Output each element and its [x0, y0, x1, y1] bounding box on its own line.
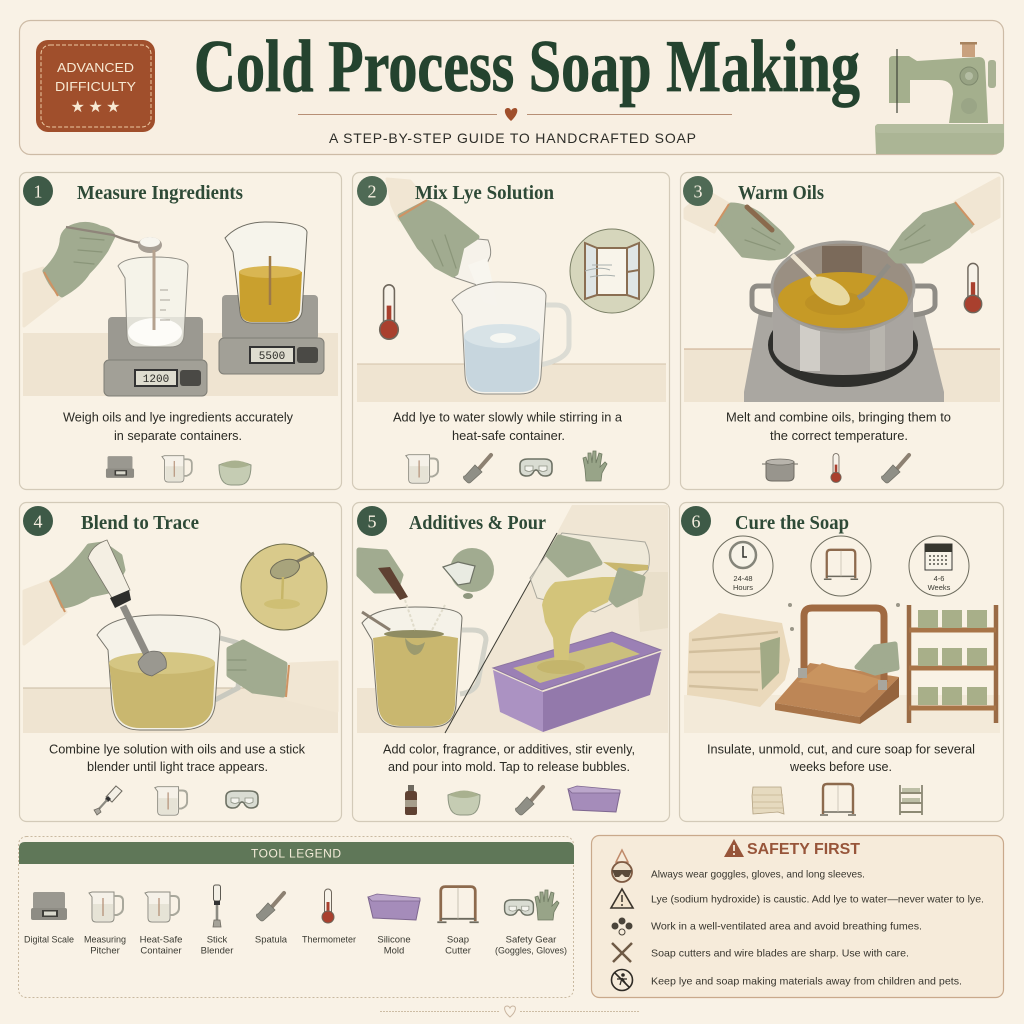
difficulty badge: ADVANCED [57, 60, 134, 75]
step heading: Additives & Pour [409, 512, 546, 534]
timing circle: 4-6 weeks [909, 536, 969, 596]
description: in separate containers. [114, 428, 242, 443]
difficulty badge [36, 40, 155, 132]
legend item: measuring pitcher: Pitcher [90, 946, 120, 956]
illustration: curing rack [909, 605, 996, 723]
step number [683, 176, 713, 206]
tool icons [106, 456, 251, 485]
step number [681, 506, 711, 536]
illustration: goggles and powder circle [443, 548, 494, 599]
illustration: arm sleeves [685, 178, 999, 232]
legend item: thermometer: Thermometer [302, 934, 356, 946]
legend item: safety gear: (Goggles, Gloves) [495, 946, 567, 956]
illustration: pot of oil [752, 242, 935, 375]
illustration: thermometer [964, 263, 982, 313]
panel: step 6 cure the soap [680, 502, 1004, 822]
safety rule: sharp blades: Soap cutters and wire blades are sharp. Use with care. [651, 948, 909, 960]
step number: 1 [34, 182, 42, 202]
step number: 6 [692, 512, 700, 532]
counter [684, 349, 1000, 402]
illustration: pouring bucket and stream [530, 533, 649, 674]
difficulty badge: ★★★ [70, 97, 120, 116]
illustration: ventilated window [570, 229, 654, 313]
counter [357, 364, 666, 402]
illustration: induction burner [744, 303, 944, 402]
illustration: pitcher of water [452, 282, 569, 394]
legend item: soap cutter [437, 887, 479, 956]
legend item: safety gear [495, 890, 567, 956]
subtitle: A STEP-BY-STEP GUIDE TO HANDCRAFTED SOAP [329, 130, 696, 146]
legend header: TOOL LEGEND [251, 846, 341, 860]
legend item: heat-safe container: Heat-Safe [140, 934, 182, 946]
safety rule: goggles: Always wear goggles, gloves, and long sleeves. [651, 868, 865, 880]
description [49, 742, 305, 774]
step number: 2 [368, 182, 376, 202]
safety rule: keep from children [612, 970, 962, 990]
panel: step 2 mix lye solution [352, 172, 670, 490]
illustration: pitcher of batter [97, 615, 241, 730]
illustration: gloved hands stirring [715, 202, 974, 312]
tool icons [752, 784, 922, 815]
illustration: gloved hand with spoon [24, 224, 162, 326]
tool icons [405, 785, 620, 815]
illustration: trace inset circle [241, 544, 327, 630]
illustration: beaker of oil on scale: 5500 [259, 351, 285, 363]
header panel [20, 20, 1004, 154]
counter left [357, 688, 457, 733]
panel: tool legend [18, 836, 574, 998]
description: Melt and combine oils, bringing them to [726, 410, 951, 424]
safety heading: SAFETY FIRST [747, 841, 860, 858]
step number: 4 [34, 512, 42, 532]
safety rule: sharp blades [612, 943, 909, 962]
divider line [445, 533, 557, 733]
legend item: measuring pitcher [84, 892, 126, 956]
counter [23, 333, 338, 396]
icon: sewing machine [875, 42, 1004, 154]
illustration: soap cutter with hand [775, 603, 900, 724]
safety rule: keep from children: Keep lye and soap making materials away from children and pets. [651, 976, 962, 988]
illustration: stick blender [88, 540, 166, 676]
legend item: stick blender: Stick [207, 934, 228, 946]
timing circle: 24-48 hours: Hours [733, 583, 753, 592]
safety rule: ventilation: Work in a well-ventilated area and avoid breathing fumes. [651, 920, 922, 932]
panel: safety first [592, 836, 1004, 998]
illustration: right arm holding handle [228, 642, 337, 711]
tool icons [762, 454, 909, 483]
legend item: heat-safe container: Container [140, 946, 182, 956]
illustration: background sleeve [636, 572, 668, 632]
description: heat-safe container. [452, 428, 565, 443]
description: Add color, fragrance, or additives, stir evenly, [383, 742, 635, 756]
diagonal pour pane [445, 505, 668, 733]
legend item: soap cutter: Cutter [445, 946, 471, 956]
step heading: Warm Oils [738, 182, 824, 204]
step number [357, 176, 387, 206]
step heading: Measure Ingredients [77, 182, 243, 204]
tool icons [94, 786, 258, 815]
timing circle: 4-6 weeks: Weeks [928, 583, 951, 592]
panel: step 3 warm oils [680, 172, 1004, 490]
step heading: Cure the Soap [735, 512, 849, 534]
description [707, 742, 975, 774]
illustration: beaker of lye on scale: 1200 [143, 374, 169, 386]
step number [357, 506, 387, 536]
illustration: beaker of lye on scale [104, 250, 207, 396]
safety rule: caustic warning: Lye (sodium hydroxide) is caustic. Add lye to water—never water to lye. [651, 894, 984, 906]
step number: 5 [368, 512, 376, 532]
description: and pour into mold. Tap to release bubbles. [388, 759, 630, 774]
description: Combine lye solution with oils and use a stick [49, 742, 305, 756]
illustration: gloved hand pouring lye [387, 179, 498, 307]
legend item: soap cutter: Soap [447, 934, 469, 946]
description: weeks before use. [789, 759, 892, 774]
illustration: thermometer [380, 285, 398, 339]
legend item: heat-safe container [140, 892, 182, 956]
description: Insulate, unmold, cut, and cure soap for several [707, 742, 975, 756]
legend item: thermometer [302, 889, 356, 946]
step number [23, 506, 53, 536]
timing circle: 4-6 weeks: 4-6 [934, 574, 944, 583]
legend item: silicone mold [368, 894, 420, 956]
legend header [19, 842, 574, 864]
legend item: spatula [255, 893, 288, 946]
step heading: Mix Lye Solution [415, 182, 554, 204]
legend item: stick blender [201, 885, 233, 956]
description: blender until light trace appears. [87, 759, 268, 774]
illustration: hand with fragrance bottle [359, 550, 408, 600]
step number [23, 176, 53, 206]
legend item: digital scale: Digital Scale [24, 934, 74, 946]
footer heart divider [380, 1006, 640, 1017]
counter [23, 688, 338, 733]
illustration: left arm holding blender [24, 544, 123, 644]
legend item: digital scale [24, 892, 74, 946]
safety rule: goggles [612, 850, 865, 882]
title divider with heart [298, 108, 732, 121]
illustration: pitcher with additives [362, 600, 486, 727]
timing circle: 24-48 hours: 24-48 [733, 574, 753, 583]
legend item: measuring pitcher: Measuring [84, 934, 126, 946]
description [63, 410, 293, 443]
panel: step 5 additives and pour [352, 502, 670, 822]
timing circle: cutter [811, 536, 871, 596]
description [393, 410, 623, 443]
difficulty badge: DIFFICULTY [55, 79, 136, 94]
timing circle: 24-48 hours [713, 536, 773, 596]
step number: 3 [694, 182, 702, 202]
illustration: insulated mold under towel [687, 613, 790, 707]
legend item: stick blender: Blender [201, 946, 233, 956]
legend item: silicone mold: Silicone [377, 934, 411, 946]
panel: step 4 blend to trace [20, 502, 342, 822]
floor [684, 695, 1000, 733]
tool icons [406, 451, 607, 483]
description [383, 742, 635, 774]
legend item: safety gear: Safety Gear [506, 934, 556, 946]
panel: step 1 measure ingredients [20, 172, 342, 490]
legend item: silicone mold: Mold [384, 946, 404, 956]
illustration: beaker of oil on scale [219, 222, 324, 374]
illustration: purple mold [493, 632, 661, 732]
step heading: Blend to Trace [81, 512, 199, 534]
description: Weigh oils and lye ingredients accurately [63, 410, 293, 424]
description [726, 410, 951, 443]
description: Add lye to water slowly while stirring in a [393, 410, 623, 424]
safety rule: caustic warning [611, 889, 984, 908]
description: the correct temperature. [770, 428, 908, 443]
legend item: spatula: Spatula [255, 934, 288, 946]
safety rule: ventilation [612, 918, 922, 935]
title: Cold Process Soap Making [194, 26, 860, 108]
